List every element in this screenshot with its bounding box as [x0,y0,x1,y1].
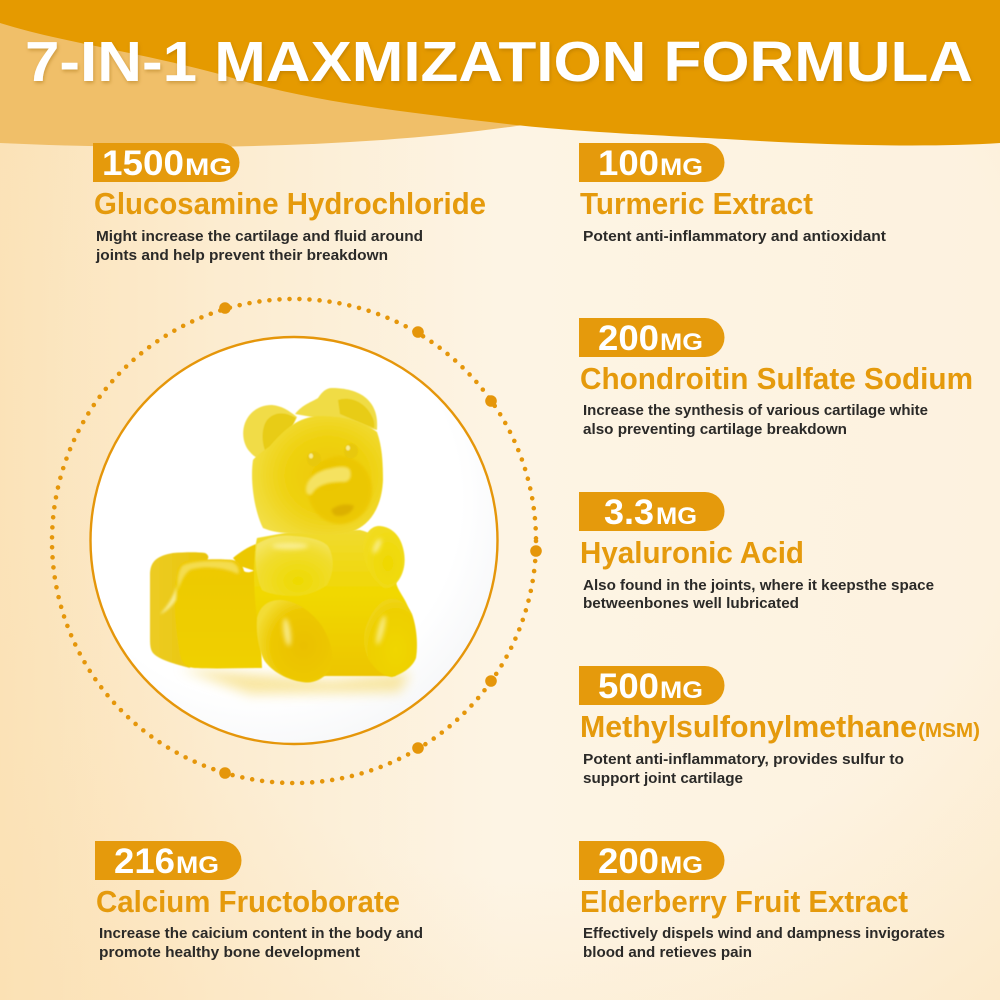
shadow under gummy [180,668,410,694]
ingredient: Methylsulfonylmethane: 500 [598,667,659,706]
ingredient: Turmeric Extract: Turmeric Extract [580,187,813,221]
bear arm left [256,536,333,596]
ingredient: Methylsulfonylmethane: (MSM) [918,720,980,742]
header banner [0,0,1000,147]
bear ears [243,388,377,460]
bear foot right [364,599,417,677]
bear arm right [363,526,405,588]
ingredient: Glucosamine Hydrochloride: Might increase the cartilage and fluid around [96,229,423,245]
bear body [254,530,412,676]
ingredient: Calcium Fructoborate: Calcium Fructoborate [96,885,400,919]
ingredient: Methylsulfonylmethane: support joint cartilage [583,771,743,787]
ingredient: Chondroitin Sulfate Sodium: 200 [598,319,659,358]
ingredient: Hyaluronic Acid: Also found in the joints, where it keepsthe space [583,578,934,594]
ingredient: Hyaluronic Acid: MG [656,503,697,530]
ingredient: Turmeric Extract: 100 [598,144,659,183]
bear muzzle [306,444,372,524]
ingredient: Methylsulfonylmethane: Methylsulfonylmethane [580,710,917,744]
ingredient: Elderberry Fruit Extract: Effectively dispels wind and dampness invigorates [583,926,945,942]
ingredient: Methylsulfonylmethane [579,666,980,787]
ingredient: Turmeric Extract: MG [660,154,703,181]
ingredient: Calcium Fructoborate: Increase the caicium content in the body and [99,926,423,942]
ingredient: Elderberry Fruit Extract: Elderberry Fruit Extract [580,885,908,919]
ingredient: Elderberry Fruit Extract: MG [660,852,703,879]
ingredient: Elderberry Fruit Extract: 200 [598,842,659,881]
icon: gummy bear with block [150,388,417,694]
ingredient: Glucosamine Hydrochloride [93,143,486,264]
ingredient: Hyaluronic Acid: betweenbones well lubricated [583,596,799,612]
ingredient: Glucosamine Hydrochloride: Glucosamine Hydrochloride [94,187,486,221]
ingredient: Hyaluronic Acid: Hyaluronic Acid [580,536,804,570]
ingredient: Glucosamine Hydrochloride: joints and help prevent their breakdown [95,248,388,264]
ingredient: Glucosamine Hydrochloride: MG [185,154,232,181]
ingredient: Calcium Fructoborate: promote healthy bone development [99,945,360,961]
ingredient: Calcium Fructoborate: 216 [114,842,175,881]
ingredient: Hyaluronic Acid: 3.3 [604,493,654,532]
ingredient: Calcium Fructoborate [95,841,423,961]
highlights [272,537,388,646]
ingredient: Methylsulfonylmethane: MG [660,677,703,704]
bear head [252,416,383,535]
bear foot left [257,600,332,683]
ingredient: Chondroitin Sulfate Sodium: also preventing cartilage breakdown [583,422,847,438]
ingredient: Chondroitin Sulfate Sodium [579,318,973,438]
ingredient: Turmeric Extract: Potent anti-inflammatory and antioxidant [583,229,886,245]
ingredient: Elderberry Fruit Extract: blood and retieves pain [583,945,752,961]
ingredient: Hyaluronic Acid [579,492,934,612]
ingredient: Chondroitin Sulfate Sodium: Chondroitin Sulfate Sodium [580,362,973,396]
dotted ring [52,299,542,783]
product disc [90,337,498,744]
ingredient: Chondroitin Sulfate Sodium: MG [660,329,703,356]
ingredient: Elderberry Fruit Extract [579,841,945,961]
ingredient: Calcium Fructoborate: MG [176,852,219,879]
ingredient: Methylsulfonylmethane: Potent anti-inflammatory, provides sulfur to [583,752,904,768]
ingredient: Chondroitin Sulfate Sodium: Increase the synthesis of various cartilage white [583,403,928,419]
gummy block [150,544,262,668]
ingredient: Glucosamine Hydrochloride: 1500 [102,144,184,183]
title: 7-IN-1 MAXMIZATION FORMULA [25,30,973,94]
ingredient: Turmeric Extract [579,143,886,245]
